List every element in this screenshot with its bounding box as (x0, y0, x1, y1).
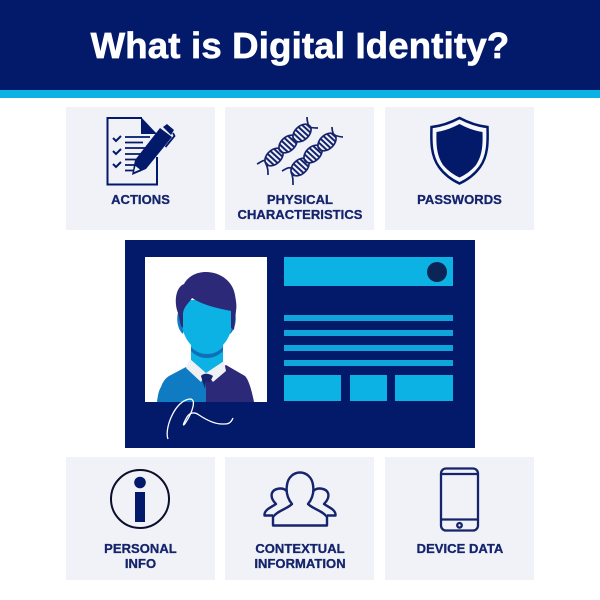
icon: people group (264, 472, 336, 526)
text lines (284, 315, 453, 366)
icon: checklist and pen (108, 117, 174, 184)
header band (0, 0, 600, 98)
label: DEVICE DATA (417, 541, 504, 556)
label: ACTIONS (111, 192, 170, 207)
photo (145, 257, 267, 402)
name bar (284, 257, 453, 286)
ID card (125, 240, 475, 448)
neck shadow (191, 347, 223, 358)
neck (191, 340, 223, 374)
label: PHYSICAL (267, 192, 333, 207)
title: What is Digital Identity? (91, 25, 509, 66)
panel: personal info (66, 457, 215, 580)
panel: passwords (385, 107, 534, 230)
label: PASSWORDS (417, 192, 502, 207)
data boxes (284, 375, 453, 401)
icon: info circle (111, 470, 169, 528)
dot (427, 262, 447, 282)
face (182, 300, 232, 353)
icon: DNA helices (257, 117, 343, 185)
icon: smartphone (441, 468, 478, 530)
tie (201, 374, 213, 389)
ears (177, 313, 236, 334)
panel: contextual information (225, 457, 374, 580)
icon: shield (431, 118, 488, 184)
hair (176, 272, 236, 330)
label: INFO (125, 556, 156, 571)
label: CHARACTERISTICS (238, 207, 363, 222)
panel: physical characteristics (225, 107, 374, 230)
label: INFORMATION (254, 556, 346, 571)
collar (186, 359, 226, 382)
signature (167, 399, 233, 439)
label: PERSONAL (104, 541, 177, 556)
panel: actions (66, 107, 215, 230)
panel: device data (385, 457, 534, 580)
body (157, 367, 206, 402)
label: CONTEXTUAL (255, 541, 345, 556)
